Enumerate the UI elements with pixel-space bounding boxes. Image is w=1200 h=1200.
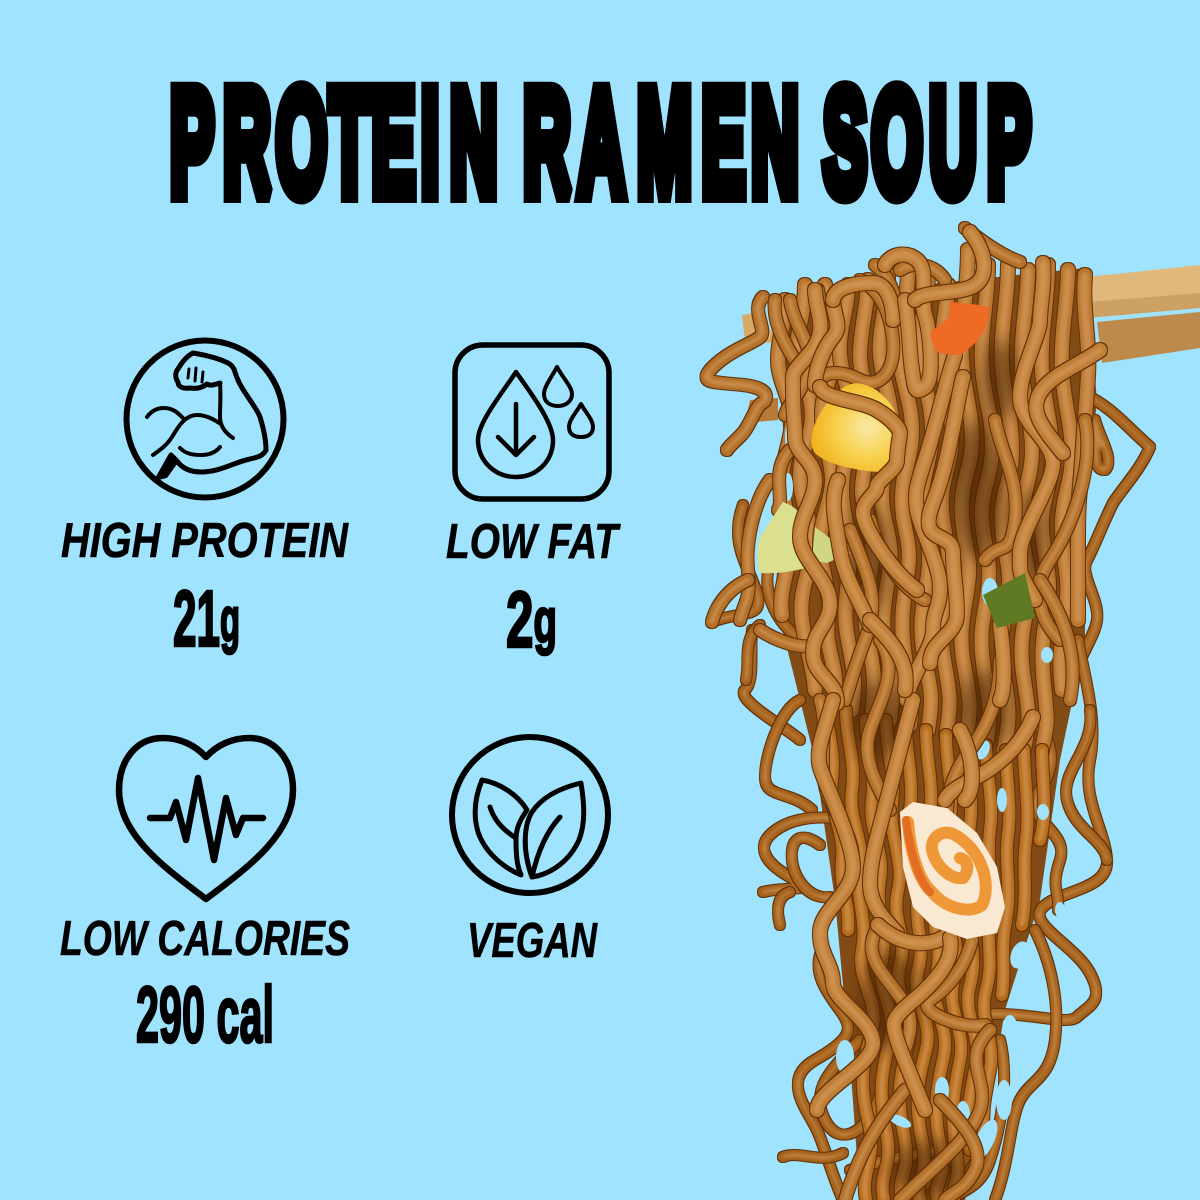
panel: low fat	[446, 345, 621, 664]
gaps between noodles showing background	[783, 421, 1065, 1164]
value: 2g: 2	[506, 575, 550, 664]
front noodle strands	[793, 232, 1100, 1110]
cabbage pieces	[757, 502, 850, 573]
zucchini piece	[983, 573, 1035, 628]
photo: noodles on chopsticks	[707, 228, 1200, 1200]
carrot piece	[930, 302, 990, 355]
value: 2g: g	[534, 587, 557, 656]
panel: high protein	[61, 340, 349, 663]
shadows in the noodle bundle	[846, 340, 1046, 1200]
panel: vegan	[452, 737, 608, 968]
title: PROTEIN RAMEN SOUP	[170, 58, 1031, 226]
icon: fat drop with down arrow	[455, 345, 609, 499]
back noodle strands	[712, 395, 1150, 1200]
label: low fat: LOW FAT	[446, 515, 621, 569]
noodle mass underlay	[772, 268, 1097, 1200]
label: low calories: LOW CALORIES	[60, 912, 350, 966]
corn kernel	[811, 383, 903, 472]
icon: heart with pulse	[119, 738, 293, 899]
chopsticks	[742, 265, 1200, 423]
value: 290 cal: 290 cal	[136, 970, 274, 1059]
label: vegan: VEGAN	[467, 914, 598, 968]
icon: flexed bicep in circle	[126, 340, 284, 498]
filler strands: upper bundle	[778, 250, 1088, 750]
value: 21g: g	[220, 586, 240, 655]
middle noodle strands	[707, 228, 1087, 1200]
panel: low calories	[60, 738, 350, 1059]
narutomaki fish cake	[900, 802, 1005, 939]
filler strands: lower bundle	[826, 700, 1044, 1200]
label: high protein: HIGH PROTEIN	[61, 514, 349, 568]
value: 21g: 21	[173, 574, 262, 663]
icon: two leaves in circle	[452, 737, 608, 893]
